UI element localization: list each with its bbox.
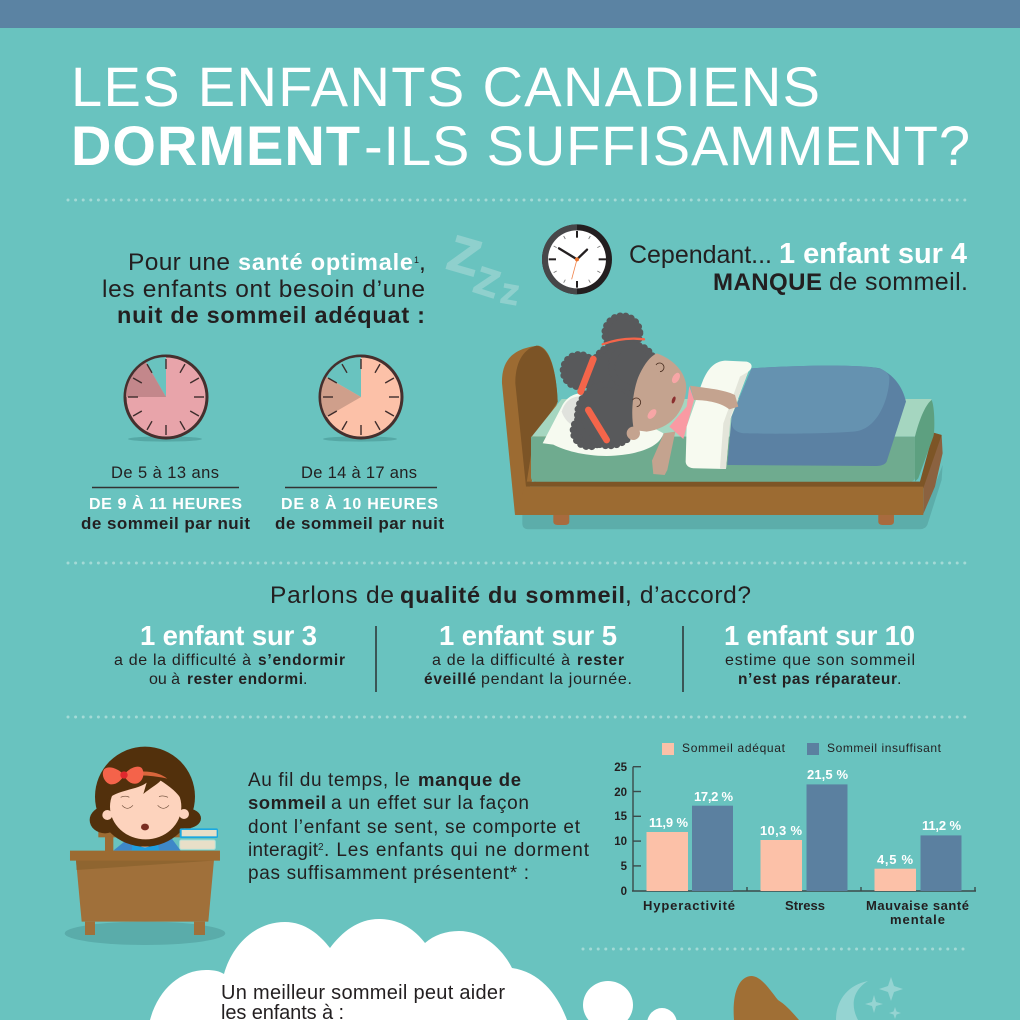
stat: 1 child in 3: 1 enfant sur 3 <box>140 620 317 651</box>
y axis numbers: 25 <box>614 762 628 774</box>
legend <box>662 741 942 755</box>
closed eyes <box>121 796 169 808</box>
text block: optimal health needs: Pour une <box>128 249 230 276</box>
bars: Stress: 21,5 % <box>807 767 848 782</box>
title: LES ENFANTS CANADIENS <box>71 55 820 118</box>
stat: 1 child in 3: rester endormi <box>187 671 303 688</box>
y axis numbers: 15 <box>614 811 628 823</box>
thought bubbles <box>583 981 677 1020</box>
stat: 1 child in 3: . <box>303 671 307 688</box>
books <box>180 828 218 838</box>
stat: 1 child in 10: estime que son sommeil <box>725 652 915 669</box>
stat: 1 child in 5: pendant la journée. <box>481 671 632 688</box>
illustration: brown hair <box>734 976 799 1020</box>
cheeks and mouth <box>670 371 682 385</box>
text block: 1 child in 4: 1 enfant sur 4 <box>779 238 967 270</box>
mouth <box>141 824 149 830</box>
thought cloud <box>150 919 567 1020</box>
legend: Sommeil adéquat <box>682 741 786 755</box>
bars: Stress: Stress <box>785 898 825 913</box>
stat: 1 child in 3: a de la difficulté à <box>114 652 251 669</box>
bars: Stress <box>760 767 848 913</box>
text block: optimal health needs <box>102 249 426 328</box>
heading: sleep quality <box>270 582 751 609</box>
icon: ZZZ: Z <box>442 225 487 287</box>
hair <box>90 747 201 847</box>
text block: 1 child in 4: MANQUE <box>713 269 822 296</box>
title: DORMENT <box>71 114 360 177</box>
age label: De 5 à 13 ans <box>111 464 219 482</box>
bed shadow <box>522 465 943 529</box>
text block: 1 child in 4: de sommeil. <box>829 268 968 296</box>
cloud text <box>221 982 505 1020</box>
bed frame <box>923 433 943 514</box>
icon: moon and stars <box>836 977 903 1020</box>
text block: optimal health needs: nuit de sommeil adéquat : <box>117 302 425 328</box>
hair ties <box>581 339 644 440</box>
bars: Mauvaise santé mentale <box>866 818 969 927</box>
illustration: child asleep at desk <box>65 747 225 945</box>
closed eyes <box>633 363 664 407</box>
bed legs <box>553 513 569 525</box>
icon: wall clock <box>542 224 612 294</box>
text block: optimal health needs: santé optimale <box>238 249 413 275</box>
heading: sleep quality: , d’accord? <box>625 582 751 609</box>
body <box>113 834 181 851</box>
icon: pink clock <box>125 356 207 442</box>
bars: Hyperactivité <box>643 789 735 913</box>
y axis numbers: 5 <box>621 861 628 873</box>
illustration: child sleeping in bed <box>502 316 943 529</box>
icon: ZZZ: Z <box>499 278 520 311</box>
chair <box>98 826 191 837</box>
icon: ZZZ: Z <box>469 260 504 307</box>
face <box>632 353 686 432</box>
resting arm <box>690 386 738 409</box>
bars: Hyperactivité: 17,2 % <box>694 789 733 804</box>
stat: 1 child in 3: s’endormir <box>258 652 345 669</box>
head pillow <box>543 393 663 456</box>
recommended hours: DE 8 À 10 HEURES <box>281 494 438 513</box>
axis <box>632 767 976 891</box>
desk <box>76 860 214 922</box>
stat: 1 child in 5 <box>424 620 632 688</box>
text block: lack of sleep effects: pas suffisamment présentent* : <box>248 863 529 884</box>
bars: Hyperactivité: Hyperactivité <box>643 898 735 913</box>
stat: 1 child in 10: n’est pas réparateur <box>738 671 897 688</box>
panel: ages 14 to 17 <box>275 356 444 533</box>
text block: optimal health needs: les enfants ont besoin d’une <box>102 276 425 303</box>
top band <box>0 0 1020 28</box>
fringe <box>107 773 183 800</box>
text block: lack of sleep effects: interagit <box>248 840 319 861</box>
shirt <box>669 386 694 439</box>
stat: 1 child in 5: rester <box>577 652 624 669</box>
per night: de sommeil par nuit <box>81 514 250 533</box>
heading: sleep quality: qualité du sommeil <box>400 582 625 608</box>
bow <box>103 767 143 784</box>
text block: optimal health needs: , <box>419 249 426 276</box>
y axis numbers: 20 <box>614 787 627 799</box>
hair <box>563 316 657 447</box>
heading: sleep quality: Parlons de <box>270 582 394 609</box>
text block: lack of sleep effects: Au fil du temps, le <box>248 770 410 791</box>
stat: 1 child in 10: . <box>897 671 901 688</box>
desk shadow <box>65 922 225 945</box>
face <box>110 774 181 839</box>
text block: 1 child in 4: Cependant... <box>629 241 772 269</box>
text block: lack of sleep effects: manque de <box>418 769 521 790</box>
text block: 1 child in 4 <box>629 238 968 296</box>
y axis numbers: 0 <box>621 886 627 898</box>
text block: optimal health needs: 1 <box>414 255 419 265</box>
stat: 1 child in 5: éveillé <box>424 671 476 688</box>
legend: Sommeil insuffisant <box>827 741 942 755</box>
text block: lack of sleep effects: dont l’enfant se sent, se comporte et <box>248 817 581 838</box>
title <box>71 55 970 177</box>
hanging arm <box>652 432 675 475</box>
text block: lack of sleep effects <box>248 769 590 884</box>
ears <box>102 810 112 820</box>
bars: Mauvaise santé mentale: mentale <box>890 912 945 927</box>
y axis numbers: 10 <box>614 836 627 848</box>
cloud text: Un meilleur sommeil peut aider <box>221 982 505 1004</box>
icon: ZZZ <box>442 225 520 311</box>
stat: 1 child in 5: a de la difficulté à <box>432 652 570 669</box>
icon: peach clock <box>320 356 402 442</box>
bars: Stress: 10,3 % <box>760 823 802 838</box>
headboard <box>502 346 558 515</box>
text block: lack of sleep effects: sommeil <box>248 792 326 813</box>
hair band <box>140 772 167 779</box>
blanket <box>727 366 906 466</box>
text block: lack of sleep effects: . Les enfants qui ne dorment <box>324 840 590 861</box>
stat: 1 child in 3: ou à <box>149 671 180 688</box>
per night: de sommeil par nuit <box>275 514 444 533</box>
stat: 1 child in 10: 1 enfant sur 10 <box>724 620 915 651</box>
stat: 1 child in 10 <box>724 620 915 688</box>
bars: Mauvaise santé mentale: Mauvaise santé <box>866 898 969 913</box>
panel: ages 5 to 13 <box>81 356 250 533</box>
age label: De 14 à 17 ans <box>301 464 417 482</box>
bars: Hyperactivité: 11,9 % <box>649 815 688 830</box>
text block: lack of sleep effects: a un effet sur la façon <box>331 793 529 814</box>
stat: 1 child in 5: 1 enfant sur 5 <box>439 620 617 651</box>
text block: lack of sleep effects: 2 <box>318 842 324 853</box>
bar chart <box>614 741 976 927</box>
blanket fold <box>686 361 752 469</box>
title: -ILS SUFFISAMMENT? <box>364 114 970 177</box>
recommended hours: DE 9 À 11 HEURES <box>89 494 242 513</box>
mattress <box>532 399 932 437</box>
y axis numbers <box>614 762 628 898</box>
bars: Mauvaise santé mentale: 11,2 % <box>922 818 961 833</box>
bars: Mauvaise santé mentale: 4,5 % <box>877 852 913 867</box>
stat: 1 child in 3 <box>114 620 345 688</box>
